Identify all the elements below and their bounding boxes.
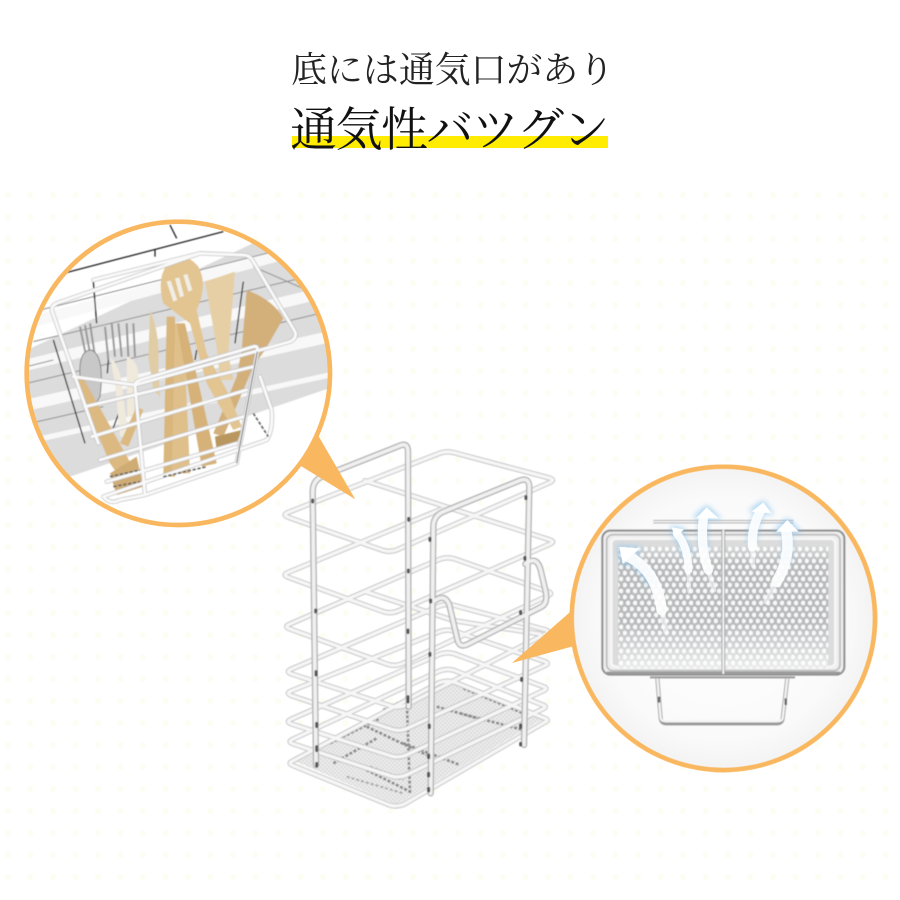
divider bbox=[718, 530, 729, 674]
callout: ventilated bottom with airflow bbox=[512, 467, 875, 770]
title bbox=[290, 50, 614, 157]
forks and knives bbox=[80, 323, 135, 367]
rack wall bbox=[29, 244, 328, 476]
highlight bar bbox=[292, 136, 608, 148]
airflow arrows bbox=[618, 502, 799, 632]
basket wires bbox=[52, 253, 296, 502]
wire rings bbox=[285, 452, 553, 806]
tray rim bbox=[602, 531, 844, 675]
circle border bbox=[572, 467, 875, 770]
front lip bbox=[607, 673, 840, 677]
arrow heads bbox=[619, 502, 799, 564]
mesh bbox=[618, 547, 828, 668]
circle background bbox=[572, 467, 875, 770]
heading line 2: 通気性バツグン bbox=[290, 105, 608, 157]
callout: utensil basket in use bbox=[20, 222, 355, 525]
perforated floor tray bbox=[293, 681, 544, 805]
circle border bbox=[27, 222, 330, 525]
callout pointer bbox=[297, 430, 355, 499]
arrow glow bbox=[618, 502, 799, 583]
hanging wire back bbox=[653, 517, 793, 527]
perforated tray top view bbox=[602, 522, 844, 723]
callout pointer bbox=[512, 603, 580, 663]
arrow bodies bbox=[628, 512, 788, 632]
slotted spoon holes bbox=[167, 274, 192, 302]
upright posts and hooks bbox=[313, 445, 546, 793]
wooden utensils bbox=[75, 257, 283, 495]
wire basket product bbox=[285, 445, 553, 806]
background dot pattern bbox=[0, 185, 900, 885]
photo: kitchen rack with utensils bbox=[20, 225, 353, 502]
circle background bbox=[27, 222, 330, 525]
heading line 1: 底には通気口があり bbox=[291, 50, 614, 90]
handle wire bbox=[657, 678, 787, 723]
